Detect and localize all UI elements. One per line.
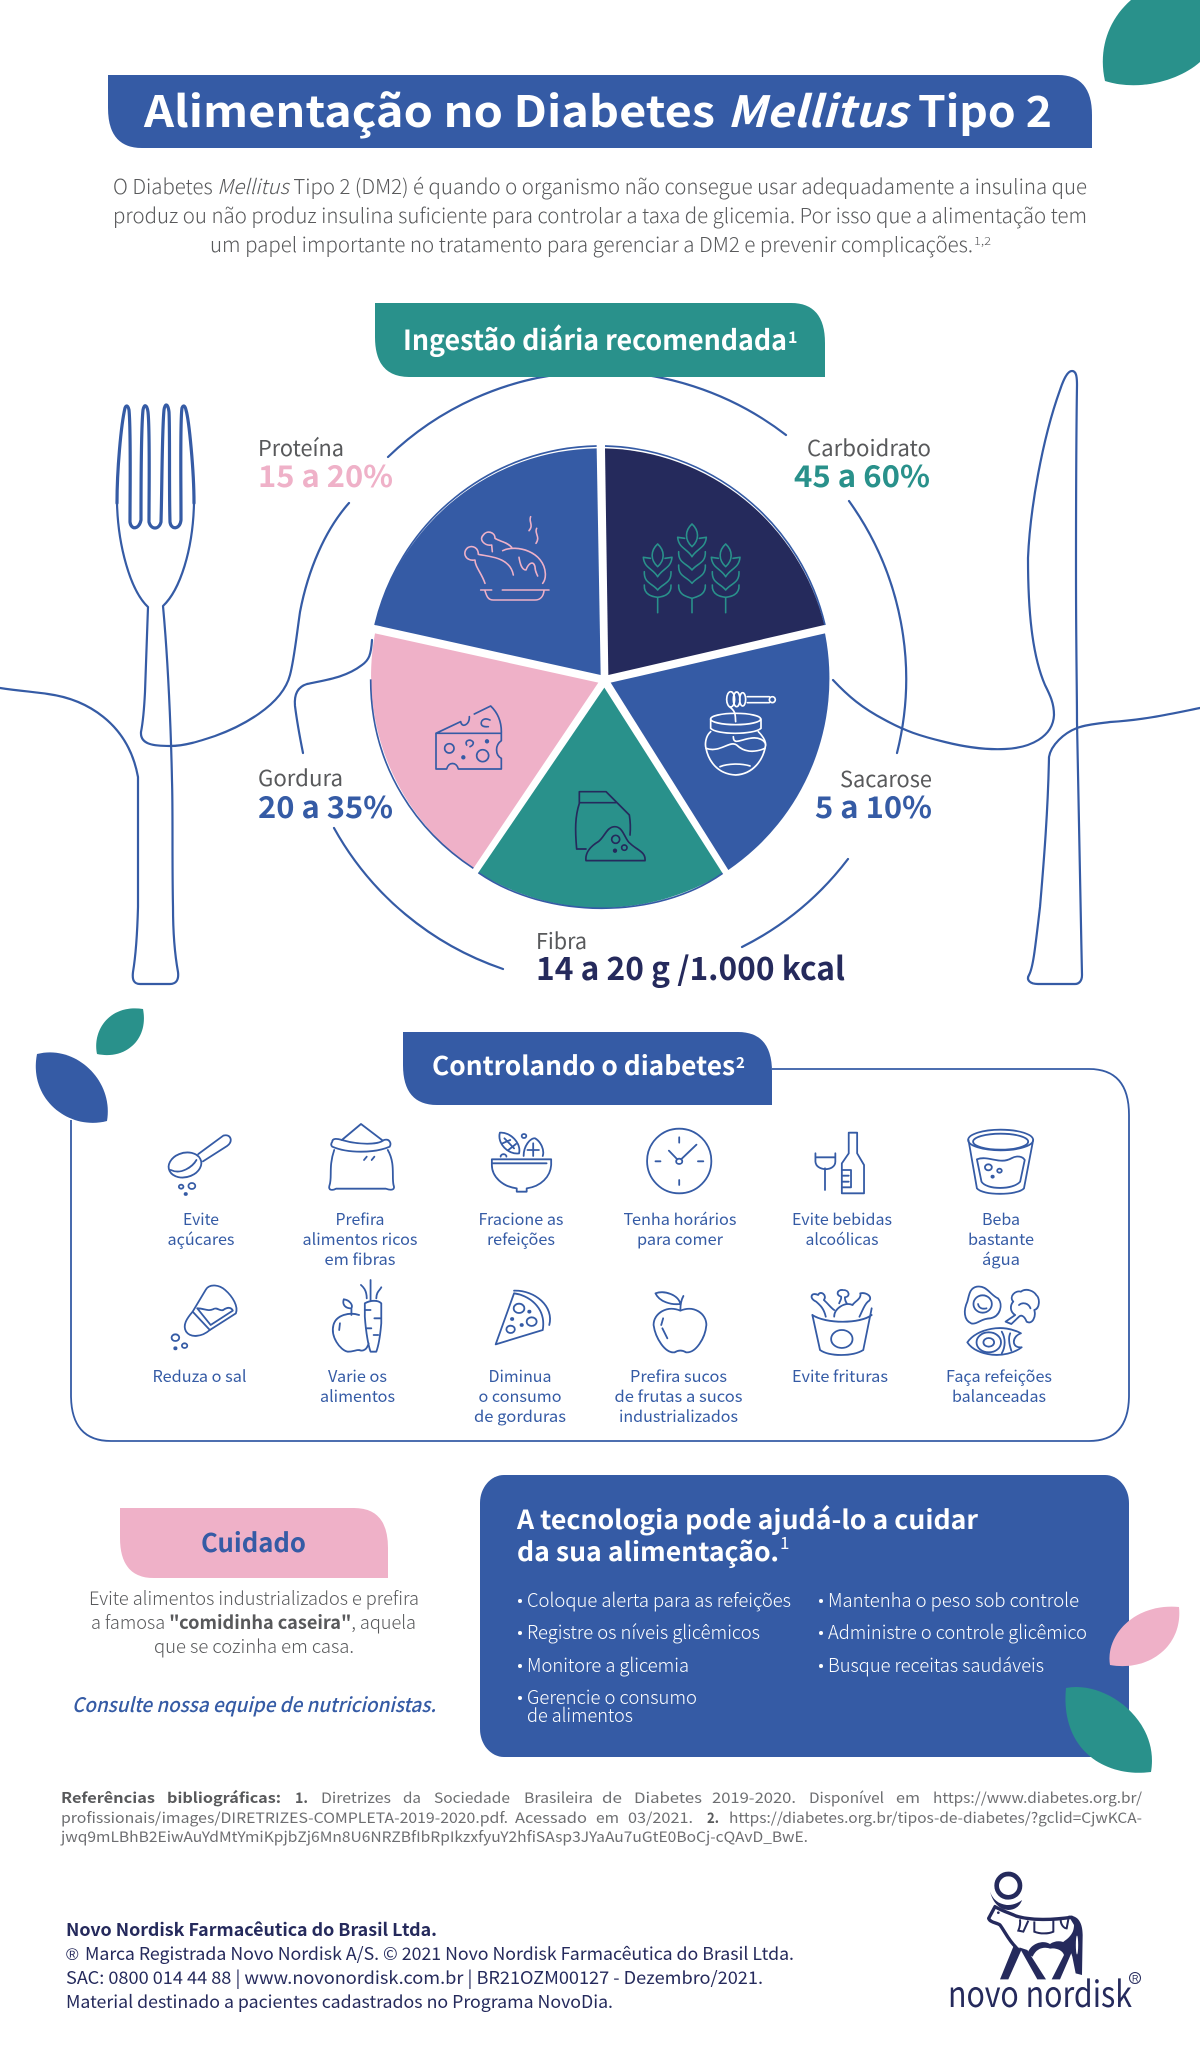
heading xyxy=(516,1500,979,1569)
connector left xyxy=(295,640,372,753)
bottom right arc xyxy=(742,859,848,947)
item captions: alimentos ricos xyxy=(302,1226,418,1250)
item captions: Fracione as xyxy=(478,1206,564,1230)
fork xyxy=(0,503,349,984)
icon: fibre sack xyxy=(329,1124,394,1190)
label: Fibra: 14 a 20 g /1.000 kcal xyxy=(536,944,845,990)
label: Fibra xyxy=(536,924,845,990)
references: em xyxy=(896,1787,920,1808)
references: Diretrizes xyxy=(321,1787,391,1808)
icon: bull and sun xyxy=(989,1874,1083,1979)
icon: clock xyxy=(647,1129,711,1193)
heading tab xyxy=(120,1508,388,1578)
icon: cheese xyxy=(436,706,501,769)
intro paragraph: produz ou não produz insulina suficiente para controlar a taxa de glicemia. Por isso que a alimentação tem xyxy=(113,199,1087,229)
references: de xyxy=(602,1787,622,1808)
references: Brasileira xyxy=(524,1787,593,1808)
footer legal text: Material destinado a pacientes cadastrados no Programa NovoDia. xyxy=(66,1989,613,2014)
intro paragraph xyxy=(113,170,1087,258)
icon: fibre bag xyxy=(576,792,645,861)
references: em xyxy=(596,1807,619,1828)
item captions: industrializados xyxy=(619,1403,738,1427)
bullet list: Monitore a glicemia xyxy=(527,1651,689,1678)
bottom left arc xyxy=(334,828,503,969)
heading tab: Cuidado xyxy=(201,1523,306,1560)
heading: A tecnologia pode ajudá-lo a cuidar xyxy=(516,1500,979,1537)
icon: glass of water xyxy=(968,1130,1033,1194)
body text: que se cozinha em casa. xyxy=(154,1633,354,1659)
item captions xyxy=(152,1206,1052,1427)
title banner: Alimentação no Diabetes xyxy=(143,78,715,140)
item captions: o consumo xyxy=(478,1383,562,1407)
icon: bowl xyxy=(492,1133,551,1192)
references: https://www.diabetes.org.br/ xyxy=(933,1787,1142,1808)
references: profissionais/images/DIRETRIZES-COMPLETA-2019-2020.pdf. xyxy=(61,1807,508,1828)
leaf: top right xyxy=(1103,0,1200,85)
plate outline xyxy=(371,446,825,908)
item captions: água xyxy=(982,1246,1020,1270)
label: Gordura xyxy=(258,761,393,827)
panel outline xyxy=(71,1069,1129,1441)
label: Carboidrato: 45 a 60% xyxy=(794,452,930,496)
item captions: alimentos xyxy=(320,1383,395,1407)
title banner: Mellitus xyxy=(727,78,912,140)
item captions: bastante xyxy=(968,1226,1034,1250)
section heading: Ingestão diária recomendada: 1 xyxy=(788,324,797,348)
label: Sacarose: 5 a 10% xyxy=(815,783,932,827)
references: Disponível xyxy=(809,1787,884,1808)
references: Referências xyxy=(61,1787,155,1808)
item captions: Evite frituras xyxy=(792,1363,888,1387)
bullet list: Mantenha o peso sob controle xyxy=(828,1586,1079,1613)
panel: controlando o diabetes xyxy=(71,1032,1129,1441)
heading tab xyxy=(403,1032,772,1105)
intro paragraph: 1,2 xyxy=(974,233,991,249)
item captions: Tenha horários xyxy=(624,1206,736,1230)
slice: proteína xyxy=(375,448,601,675)
pie chart xyxy=(371,446,829,908)
knife xyxy=(833,371,1200,984)
label: Gordura: Gordura xyxy=(258,761,343,793)
bullet list: Administre o controle glicêmico xyxy=(828,1618,1087,1645)
body text xyxy=(89,1585,419,1659)
leaf: blue xyxy=(36,1052,108,1123)
logo: novo nordisk xyxy=(948,1874,1140,2018)
icon: apple xyxy=(654,1292,706,1352)
label: Sacarose xyxy=(815,762,932,827)
icon: egg, broccoli and fish xyxy=(965,1286,1039,1355)
item captions: de gorduras xyxy=(474,1403,566,1427)
item captions: Faça refeições xyxy=(946,1363,1052,1387)
item captions: Prefira xyxy=(336,1206,384,1230)
label: Carboidrato xyxy=(794,431,931,496)
references: 03/2021. xyxy=(628,1807,693,1828)
slice: sacarose xyxy=(611,633,829,870)
icon: salt shaker xyxy=(172,1285,237,1349)
item captions: Evite bebidas xyxy=(792,1206,892,1230)
section heading: Ingestão diária recomendada xyxy=(375,303,825,377)
item captions: balanceadas xyxy=(952,1383,1046,1407)
intro paragraph: um papel importante no tratamento para gerenciar a DM2 e prevenir complicações. xyxy=(210,228,973,258)
body text: a famosa "comidinha caseira", aquela xyxy=(91,1609,416,1635)
label: Proteína: 15 a 20% xyxy=(258,452,393,496)
item captions: Evite xyxy=(183,1206,219,1230)
top arc of plate ring xyxy=(388,372,786,457)
references: da xyxy=(403,1787,421,1808)
item captions: açúcares xyxy=(168,1226,234,1250)
icon: fried chicken bucket xyxy=(812,1290,872,1355)
slice: gordura xyxy=(371,633,598,868)
references: https://diabetes.org.br/tipos-de-diabetes/?gclid=CjwKCA- xyxy=(729,1807,1142,1828)
icon: spoon xyxy=(164,1135,231,1195)
bullet list: Registre os níveis glicêmicos xyxy=(527,1618,760,1645)
references: 2019-2020. xyxy=(712,1787,796,1808)
item captions: em fibras xyxy=(324,1246,396,1270)
logo: novo nordisk: R xyxy=(1132,1974,1139,1984)
bullet list: Gerencie o consumo xyxy=(527,1683,697,1710)
item captions: Diminua xyxy=(488,1363,552,1387)
references: jwq9mLBhB2EiwAuYdMtYmiKpjbZj6Mn8U6NRZBfIbRpIkzxfyuY2hfiSAsp3JYaAu7uGtE0BoCj-cQAvD_BwE. xyxy=(60,1826,808,1847)
label: Fibra: Fibra xyxy=(536,924,587,956)
references: Diabetes xyxy=(634,1787,702,1808)
bullet list: Coloque alerta para as refeições xyxy=(527,1586,791,1613)
right arc of plate ring xyxy=(849,501,906,753)
item captions: Prefira sucos xyxy=(630,1363,727,1387)
footer legal text: SAC: 0800 014 44 88 | www.novonordisk.com.br | BR21OZM00127 - Dezembro/2021. xyxy=(66,1965,763,1990)
leaf: teal xyxy=(96,1008,144,1055)
panel: tecnologia xyxy=(480,1475,1129,1757)
item captions: Beba xyxy=(982,1206,1020,1230)
references: bibliográficas: xyxy=(167,1787,281,1808)
icon: pizza slice xyxy=(496,1291,550,1344)
footer legal text xyxy=(66,1917,794,2014)
references: 1. xyxy=(295,1787,308,1808)
heading tab: Controlando o diabetes xyxy=(432,1046,735,1083)
label: Gordura: 20 a 35% xyxy=(258,783,393,827)
title banner xyxy=(108,75,1092,148)
slice: fibra xyxy=(478,688,723,908)
item captions: de frutas a sucos xyxy=(614,1383,742,1407)
label: Proteína: Proteína xyxy=(258,431,344,463)
item captions: Varie os xyxy=(328,1363,387,1387)
bullet list: Busque receitas saudáveis xyxy=(828,1651,1044,1678)
item captions: refeições xyxy=(487,1226,555,1250)
icon: wine and bottle xyxy=(815,1133,864,1193)
slice: carboidrato xyxy=(605,448,824,675)
logo: novo nordisk: novo nordisk xyxy=(948,1966,1132,2018)
fork tines xyxy=(117,405,194,528)
references: Acessado xyxy=(515,1807,587,1828)
section heading: Ingestão diária recomendada: Ingestão diária recomendada xyxy=(403,318,787,358)
heading: 1 xyxy=(780,1529,789,1554)
label: Carboidrato: Carboidrato xyxy=(807,431,931,463)
icon: wheat xyxy=(643,524,740,613)
call to action: Consulte nossa equipe de nutricionistas. xyxy=(72,1689,436,1718)
heading: da sua alimentação. xyxy=(517,1532,779,1569)
item captions: Reduza o sal xyxy=(152,1363,246,1387)
footer legal text: Novo Nordisk Farmacêutica do Brasil Ltda. xyxy=(66,1917,437,1942)
icons right columns xyxy=(647,1129,1039,1355)
bullet list xyxy=(518,1586,1087,1728)
icons left columns xyxy=(164,1124,551,1352)
cutlery and plate rings line art xyxy=(0,371,1200,984)
footer legal text: Marca Registrada Novo Nordisk A/S. © 2021 Novo Nordisk Farmacêutica do Brasil Ltda. xyxy=(85,1941,794,1966)
callout: cuidado xyxy=(72,1508,436,1718)
icon: chicken xyxy=(465,517,549,600)
heading tab: 2 xyxy=(736,1052,745,1073)
body text: Evite alimentos industrializados e prefira xyxy=(89,1585,419,1611)
leaf: pink xyxy=(1109,1607,1179,1666)
title banner: Tipo 2 xyxy=(918,78,1052,140)
references: 2. xyxy=(707,1807,719,1828)
icon: honey jar xyxy=(705,692,775,775)
footer legal text: ® xyxy=(66,1945,79,1964)
icon: apple and carrot xyxy=(333,1280,381,1352)
leaf: teal bottom xyxy=(1065,1687,1152,1773)
references xyxy=(60,1787,1142,1847)
intro paragraph: O Diabetes Mellitus Tipo 2 (DM2) é quando o organismo não consegue usar adequadamente a insulina que xyxy=(113,170,1087,200)
item captions: alcoólicas xyxy=(806,1226,878,1250)
references: Sociedade xyxy=(434,1787,510,1808)
label: Sacarose: Sacarose xyxy=(840,762,932,794)
bullet list: de alimentos xyxy=(527,1701,633,1728)
item captions: para comer xyxy=(637,1226,724,1250)
label: Proteína xyxy=(258,431,393,496)
